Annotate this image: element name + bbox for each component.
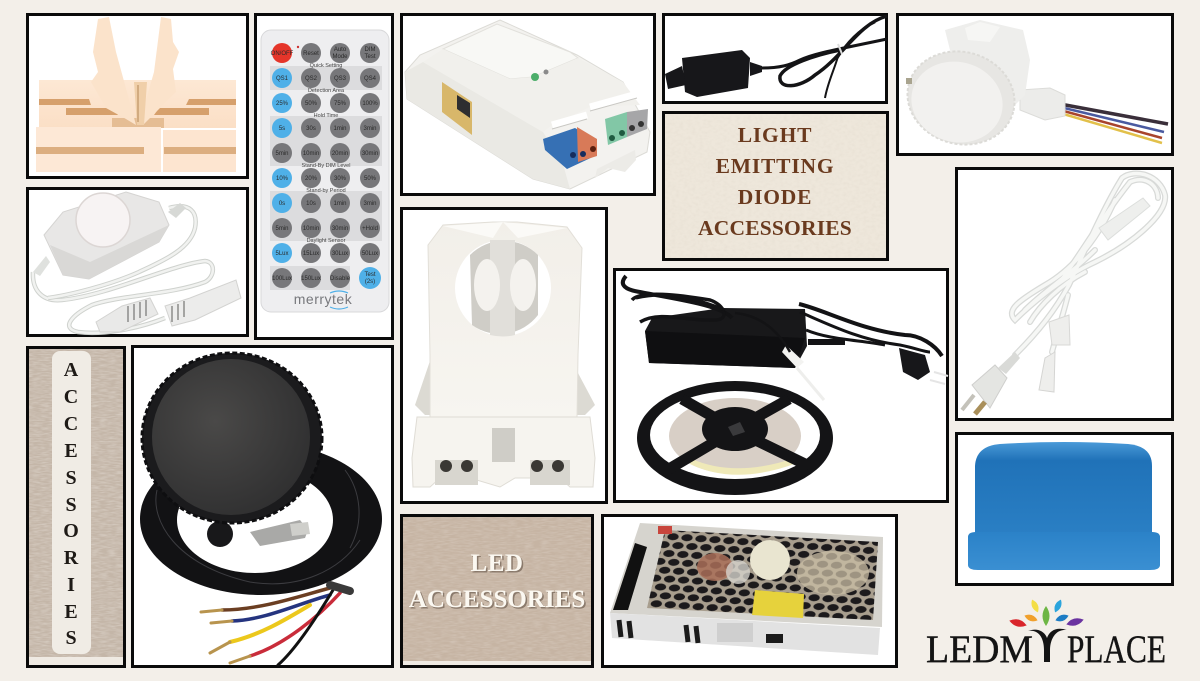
heading: LED accessories: LED — [471, 550, 523, 577]
panel: tombstone lamp holder — [402, 208, 606, 502]
icon: black junction box and cable — [665, 16, 887, 98]
remote buttons: 10min — [303, 151, 319, 157]
remote buttons: Hold Time — [314, 113, 338, 119]
icon: sensor housing — [405, 20, 650, 189]
icon: round sensor with wires — [897, 20, 1168, 156]
remote buttons: QS2 — [305, 76, 318, 82]
remote buttons: 0s — [279, 201, 285, 207]
remote buttons: Detection Area — [308, 88, 345, 94]
heading: accessories vertical: C — [64, 386, 78, 408]
panel: vertical accessories label — [26, 346, 126, 668]
icon: dimmer cable — [33, 206, 213, 333]
heading: LED accessories: ACCESSORIES — [409, 586, 585, 613]
remote buttons: 1min — [333, 126, 347, 132]
panel: LED accessories label — [400, 514, 594, 668]
logo text: PLACE — [1067, 628, 1166, 671]
icon: cable loop — [140, 443, 382, 595]
panel: black disc sensor — [132, 346, 392, 666]
remote buttons: Quick Setting — [310, 63, 342, 69]
icon: connector — [36, 17, 236, 172]
remote buttons: Disable — [330, 276, 351, 282]
icon: coiled cord — [1012, 173, 1165, 355]
remote buttons: DIM — [364, 47, 376, 53]
panel: power supply — [602, 516, 896, 666]
remote buttons: 50% — [364, 176, 377, 182]
remote buttons: 3min — [363, 201, 377, 207]
remote buttons: 10% — [276, 176, 289, 182]
icon: ribbed disc — [142, 353, 322, 547]
remote buttons: 30s — [306, 126, 316, 132]
heading: light emitting diode accessories: EMITTING — [716, 154, 834, 178]
remote buttons: 30Lux — [332, 251, 348, 257]
remote buttons — [271, 43, 381, 289]
heading: accessories vertical: A — [64, 359, 79, 381]
icon: dimmer body and connector — [33, 192, 241, 332]
icon: lamp holder — [412, 222, 595, 487]
remote buttons: 150Lux — [301, 276, 321, 282]
remote buttons: 5min — [275, 151, 289, 157]
remote buttons: 50% — [305, 101, 318, 107]
heading: LED accessories: ACCESSORIES — [410, 588, 587, 614]
logo text: LEDM — [926, 628, 1033, 671]
icon: LED strip reel — [637, 381, 833, 495]
remote buttons: Auto — [334, 47, 347, 53]
panel: LED strip and adapter — [614, 270, 948, 502]
remote buttons: 5min — [275, 226, 289, 232]
remote buttons: 25% — [276, 101, 289, 107]
heading: accessories vertical — [63, 359, 79, 649]
panel: LED strip connector — [28, 14, 248, 178]
panel: sealed cable — [664, 14, 887, 102]
icon: perforated power supply — [610, 523, 883, 655]
remote buttons: 1min — [333, 201, 347, 207]
heading: LED accessories: LED — [472, 552, 525, 578]
icon: coloured leaves — [1008, 598, 1085, 629]
remote buttons: 15Lux — [303, 251, 319, 257]
remote buttons: 75% — [334, 101, 347, 107]
heading: accessories vertical: S — [65, 627, 77, 649]
remote buttons: 30min — [362, 151, 378, 157]
icon: plugs and switch — [962, 198, 1150, 414]
heading: accessories vertical: O — [63, 520, 79, 542]
remote buttons: Stand-By DIM Level — [302, 163, 350, 169]
heading: light emitting diode accessories: DIODE — [738, 185, 812, 209]
remote buttons: 100Lux — [272, 276, 292, 282]
remote buttons: +Hold — [362, 226, 378, 232]
remote body — [261, 30, 389, 312]
remote buttons: Daylight Sensor — [307, 238, 346, 244]
remote buttons: ON/OFF — [271, 51, 294, 57]
remote buttons: 50Lux — [362, 251, 378, 257]
remote buttons: Test — [364, 54, 376, 60]
heading: accessories vertical: S — [65, 494, 77, 516]
icon: coloured wires — [201, 585, 350, 665]
panel: round sensor — [897, 14, 1172, 156]
remote buttons: 100% — [362, 101, 378, 107]
remote buttons: Mode — [332, 54, 348, 60]
remote buttons: 5s — [279, 126, 285, 132]
panel: dimmer — [28, 188, 248, 336]
remote buttons: 10s — [306, 201, 316, 207]
logo text — [926, 628, 1166, 671]
remote buttons: Stand-by Period — [306, 188, 346, 194]
icon: blue cap — [968, 442, 1160, 570]
remote buttons: 30min — [332, 226, 348, 232]
heading: accessories vertical: E — [64, 601, 78, 623]
remote buttons: Reset — [303, 51, 319, 57]
heading: light emitting diode accessories: LIGHT — [738, 123, 812, 147]
remote buttons: QS4 — [364, 76, 377, 82]
remote buttons: 20min — [332, 151, 348, 157]
panel: white power cord — [956, 168, 1172, 420]
panel: remote control — [256, 14, 392, 338]
remote buttons: 3min — [363, 126, 377, 132]
panel: blue photocell cap — [956, 434, 1172, 584]
panel: title — [662, 111, 889, 261]
icon: power adapter — [623, 276, 948, 400]
remote buttons: QS1 — [276, 76, 289, 82]
heading: accessories vertical: C — [64, 413, 78, 435]
icon: tree trunk — [1028, 629, 1067, 662]
heading: accessories vertical: S — [65, 467, 77, 489]
heading: accessories vertical: E — [64, 440, 78, 462]
heading: accessories vertical: I — [67, 574, 75, 596]
remote buttons: 30% — [334, 176, 347, 182]
heading: light emitting diode accessories — [698, 123, 852, 240]
remote buttons: 20% — [305, 176, 318, 182]
panel: microwave sensor — [402, 14, 654, 194]
heading: light emitting diode accessories: ACCESSORIES — [698, 216, 852, 240]
heading: LED accessories — [409, 550, 587, 614]
heading: accessories vertical: R — [64, 547, 79, 569]
remote buttons: QS3 — [334, 76, 347, 82]
remote buttons: (2s) — [365, 279, 375, 285]
logo: LEDMyPlace — [926, 598, 1166, 671]
remote buttons: 10min — [303, 226, 319, 232]
remote logo: merrytek — [294, 291, 353, 307]
remote buttons: 5Lux — [275, 251, 289, 257]
remote buttons: Test — [364, 272, 376, 278]
